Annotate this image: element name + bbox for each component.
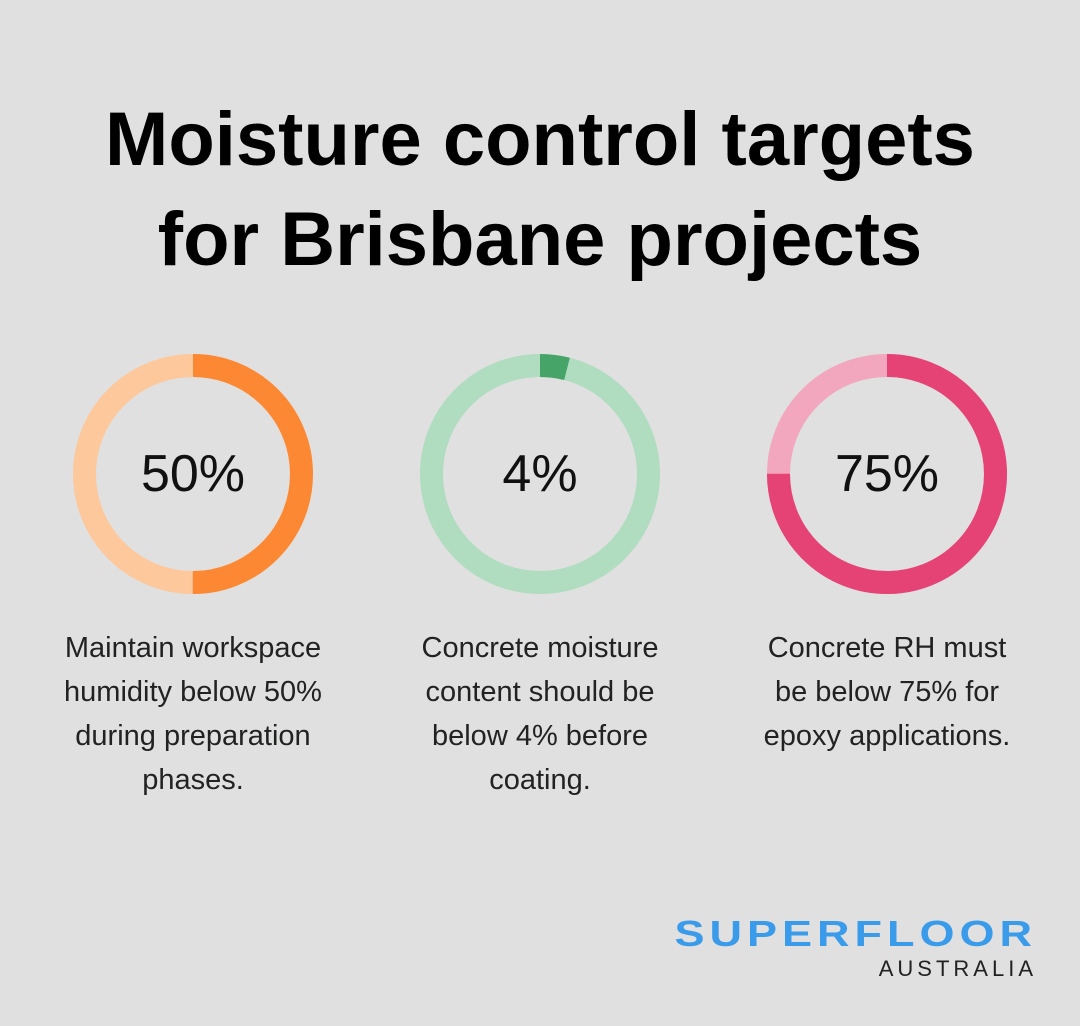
donut: 4% [420, 354, 660, 594]
logo [674, 913, 1037, 981]
title [105, 97, 975, 282]
title: Moisture control targets [105, 97, 975, 182]
logo: SUPERFLOOR [674, 913, 1037, 954]
caption: moisture content: Concrete moisture content should be below 4% before coating. [422, 632, 658, 796]
value: 4%: 4% [502, 445, 578, 503]
title: for Brisbane projects [158, 197, 922, 282]
donut: 50% [73, 354, 313, 594]
caption: humidity: Maintain workspace humidity below 50% during preparation phases. [64, 632, 322, 796]
donut: 75% [767, 354, 1007, 594]
logo: AUSTRALIA [879, 956, 1037, 981]
caption: RH: Concrete RH must be below 75% for epoxy applications. [764, 632, 1010, 752]
value: 75%: 75% [835, 445, 939, 503]
value: 50%: 50% [141, 445, 245, 503]
